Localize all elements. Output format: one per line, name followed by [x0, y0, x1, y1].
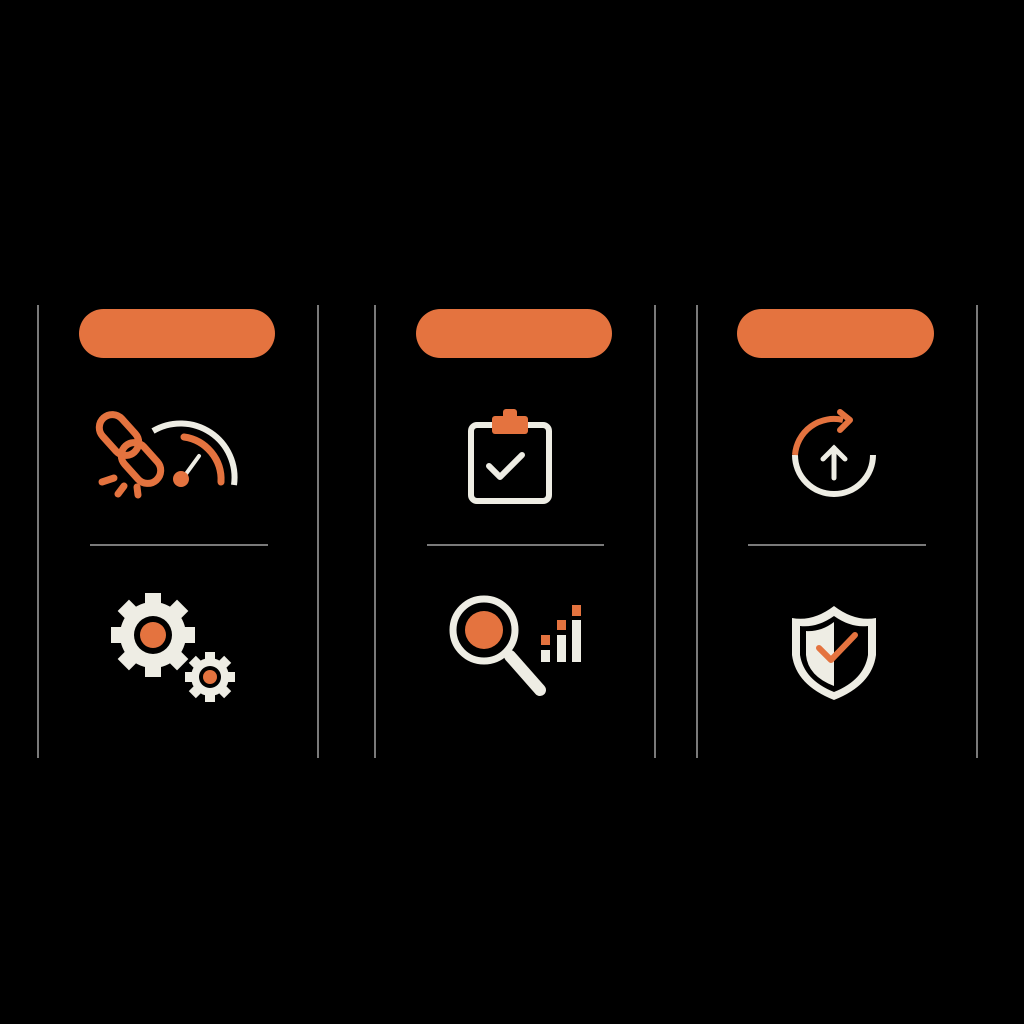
pill: column 1 header: [79, 309, 275, 358]
pill: column 3 header: [737, 309, 934, 358]
icon: broken chain and gauge: [94, 409, 235, 495]
icon: refresh with up arrow: [795, 412, 873, 494]
icon: magnifier with bars: [453, 599, 581, 690]
icon: gears: [111, 593, 235, 702]
pill: column 2 header: [416, 309, 612, 358]
icon: clipboard with check: [471, 409, 549, 501]
icon: shield with check: [792, 606, 876, 700]
